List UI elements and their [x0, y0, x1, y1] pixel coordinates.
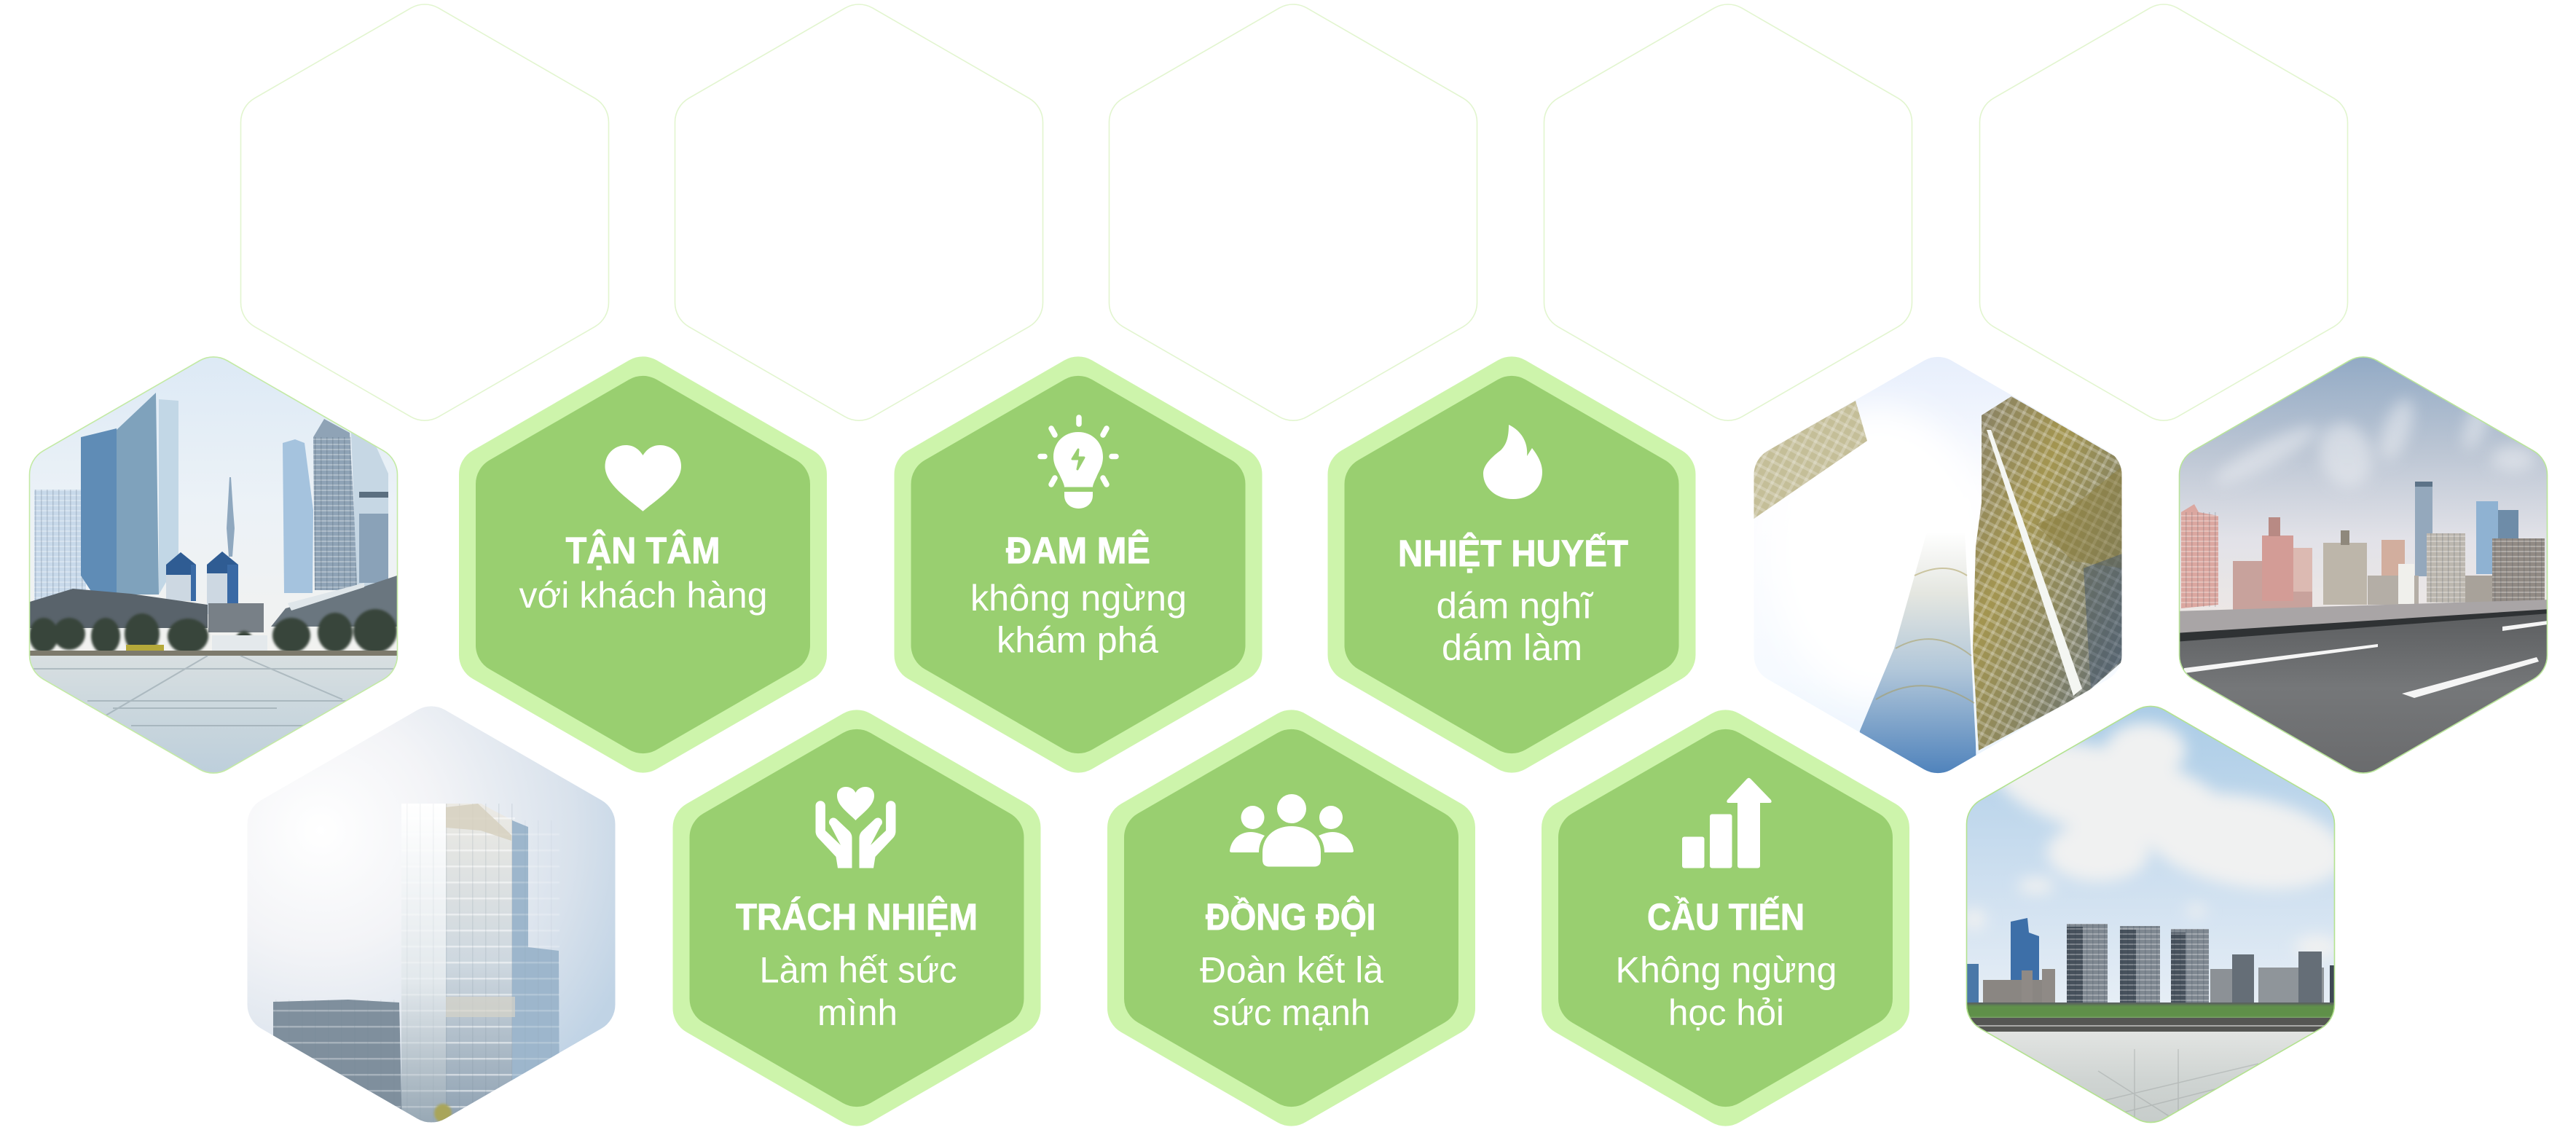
icon: light bulb: [1040, 417, 1116, 509]
photo hexagon: city towers and plaza: [22, 350, 408, 780]
text: với khách hàng: với khách hàng: [519, 575, 768, 616]
heading: CẦU TIẾN: CẦU TIẾN: [1647, 895, 1805, 938]
decorative empty hexagon outlines row: [240, 4, 2347, 420]
text: dám nghĩ dám làm: dám làm: [1442, 627, 1582, 668]
text: Đoàn kết là sức mạnh: sức mạnh: [1212, 992, 1370, 1033]
text: dám nghĩ dám làm: [1437, 586, 1594, 668]
text: không ngừng khám phá: khám phá: [997, 619, 1158, 660]
heading: ĐAM MÊ: ĐAM MÊ: [1006, 529, 1150, 571]
text: dám nghĩ dám làm: dám nghĩ: [1437, 586, 1594, 627]
text: Đoàn kết là sức mạnh: Đoàn kết là: [1200, 950, 1383, 991]
text: Không ngừng học hỏi: [1616, 950, 1837, 1033]
text: Không ngừng học hỏi: Không ngừng: [1616, 950, 1837, 991]
icon: hands holding heart: [816, 787, 896, 868]
text: Làm hết sức mình: [759, 950, 957, 1033]
heading: ĐỒNG ĐỘI: ĐỒNG ĐỘI: [1206, 895, 1375, 938]
text: không ngừng khám phá: [970, 578, 1187, 660]
icon: flame: [1483, 425, 1542, 499]
photo hexagon: city skyline and road: [2171, 350, 2557, 780]
icon: team of people: [1230, 794, 1354, 867]
hexagon card: CẦU TIẾN: [1542, 710, 1909, 1126]
photo hexagon: glass office tower: [240, 699, 623, 1129]
text: Không ngừng học hỏi: học hỏi: [1668, 992, 1784, 1033]
hexagon card: ĐỒNG ĐỘI: [1107, 710, 1475, 1126]
photo hexagon: skyscrapers looking up: [1745, 350, 2131, 780]
hexagon card: TRÁCH NHIỆM: [673, 710, 1040, 1126]
text: Làm hết sức mình: Làm hết sức: [759, 950, 957, 991]
icon: growth bars with arrow: [1682, 778, 1772, 868]
hexagon card: TẬN TÂM: [459, 356, 827, 773]
heading: TẬN TÂM: TẬN TÂM: [565, 529, 720, 571]
hexagon card: NHIỆT HUYẾT: [1327, 356, 1696, 773]
hexagon card: ĐAM MÊ: [895, 356, 1262, 773]
text: Làm hết sức mình: mình: [817, 992, 898, 1033]
text: Đoàn kết là sức mạnh: [1200, 950, 1383, 1033]
heading: TRÁCH NHIỆM: TRÁCH NHIỆM: [736, 895, 978, 938]
icon: heart: [605, 445, 681, 511]
text: không ngừng khám phá: không ngừng: [970, 578, 1187, 619]
heading: NHIỆT HUYẾT: NHIỆT HUYẾT: [1398, 532, 1628, 574]
photo hexagon: residential skyline with hedge: [1960, 699, 2352, 1129]
